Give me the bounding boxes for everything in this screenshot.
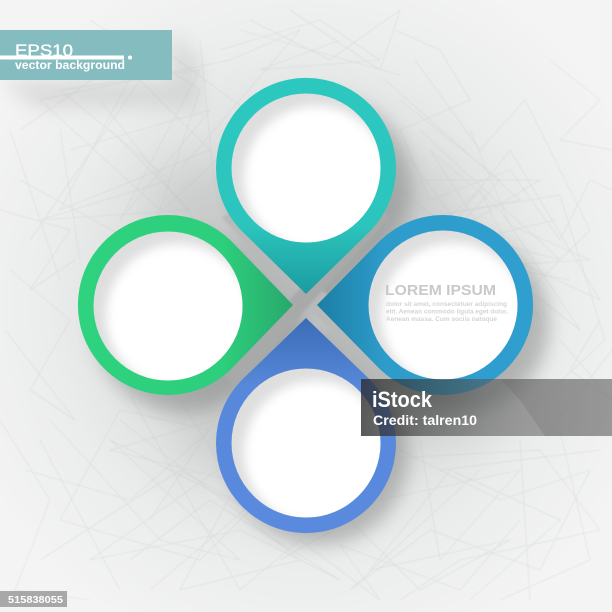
- panel: bottom pin: [216, 318, 396, 533]
- top white circle: [232, 94, 388, 250]
- banner shadow: [0, 30, 200, 108]
- bottom white circle: [232, 368, 388, 525]
- bottom pin body: [216, 318, 396, 533]
- panel: left pin: [78, 215, 293, 395]
- left pin body: [78, 215, 293, 395]
- left white circle: [94, 232, 250, 388]
- panel: right pin: [317, 215, 533, 395]
- right circle body text: dolor sit amet, consectetuer adipiscing: [386, 302, 507, 308]
- watermark credit: Credit: talren10: [373, 413, 477, 428]
- top pin body: [216, 78, 396, 294]
- right white circle: [368, 230, 525, 387]
- banner: [0, 30, 172, 80]
- gray X band: [222, 205, 402, 386]
- right circle body text: [386, 302, 508, 323]
- image id: 515838055: [8, 594, 63, 606]
- banner title: EPS10: [15, 42, 73, 60]
- image id: [0, 591, 67, 607]
- banner rule: [0, 56, 124, 60]
- long shadows: [94, 96, 549, 545]
- central soft shadow: [150, 170, 500, 470]
- right circle body text: Aenean massa. Cum sociis natoque: [386, 317, 498, 323]
- watermark: [361, 379, 612, 436]
- banner subtitle: vector background: [15, 60, 125, 72]
- banner dot: [128, 56, 132, 60]
- watermark logo: iStock: [372, 387, 433, 412]
- watermark blotches: [500, 379, 612, 436]
- right circle body text: elit. Aenean commodo ligula eget dolor.: [386, 310, 508, 316]
- right pin body: [317, 215, 533, 395]
- right circle heading: LOREM IPSUM: [385, 283, 496, 299]
- panel: top pin: [216, 78, 396, 294]
